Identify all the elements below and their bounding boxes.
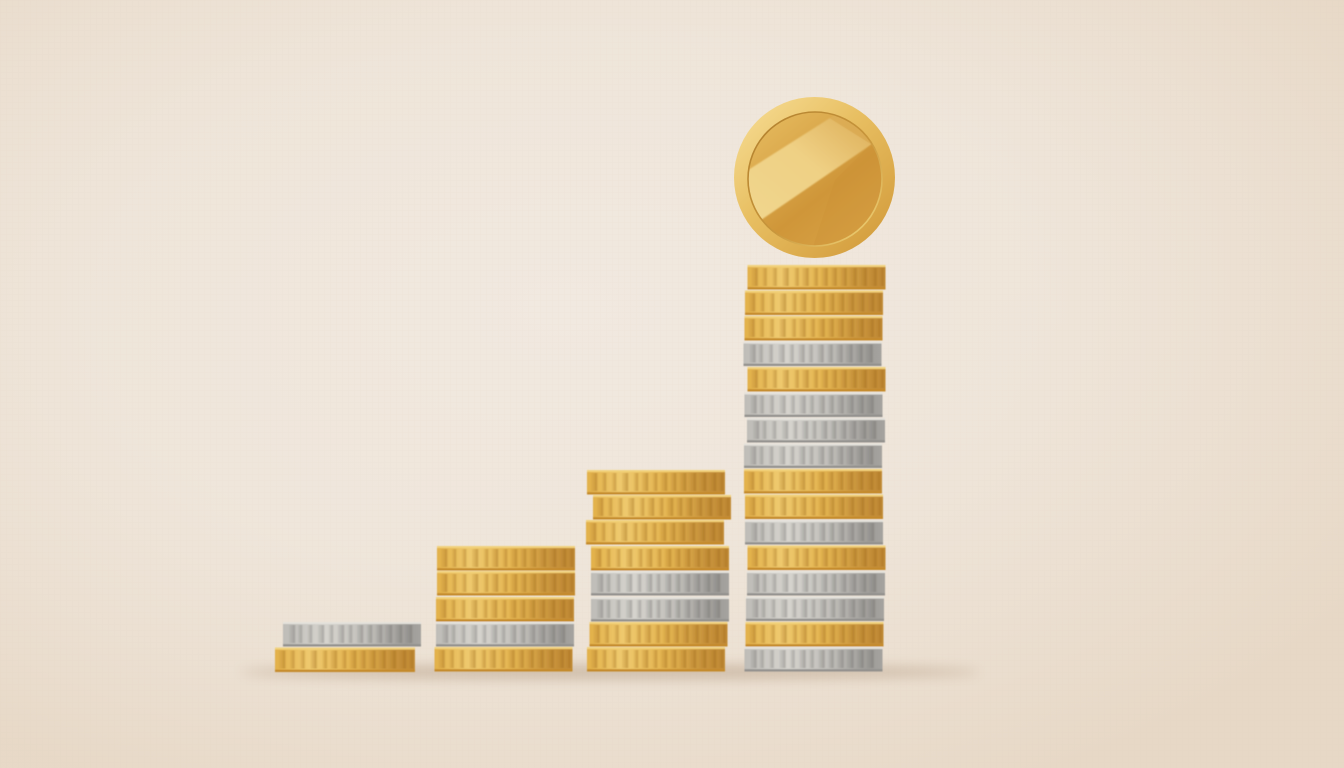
stack 1: two coins — [275, 622, 421, 672]
silver coin — [747, 418, 885, 442]
gold coin — [748, 367, 886, 392]
silver coin — [744, 342, 882, 366]
inner ring — [748, 112, 882, 246]
silver coin — [744, 392, 882, 417]
gold coin — [591, 546, 729, 570]
silver coin — [745, 520, 883, 544]
ground shadow — [240, 665, 980, 679]
gold coin — [744, 469, 882, 494]
stack 2: five coins — [434, 546, 575, 672]
gold coin — [748, 546, 886, 570]
gold coin — [434, 647, 572, 672]
coin face — [748, 112, 882, 246]
silver coin — [747, 571, 885, 596]
gold coin — [745, 290, 883, 315]
stack 4: sixteen coins — [744, 265, 886, 672]
gold coin — [745, 494, 883, 519]
silver coin — [283, 622, 421, 646]
coin rim — [734, 97, 895, 258]
gold coin — [437, 571, 575, 596]
silver coin — [436, 622, 574, 646]
gold coin — [748, 265, 886, 290]
gold coin — [587, 470, 725, 494]
gold coin — [744, 316, 882, 340]
diagonal highlight — [748, 117, 871, 220]
gold coin — [436, 597, 574, 622]
silver coin — [744, 444, 882, 468]
large floating gold coin — [734, 97, 895, 258]
gold coin — [590, 622, 728, 646]
silver coin — [591, 597, 729, 622]
stack 3: eight coins — [586, 470, 731, 672]
silver coin — [591, 571, 729, 596]
gold coin — [437, 546, 575, 570]
silver coin — [744, 647, 882, 672]
gold coin — [746, 622, 884, 646]
gold coin — [586, 520, 724, 544]
gold coin — [593, 495, 731, 520]
silver coin — [746, 596, 884, 621]
gold coin — [587, 647, 725, 672]
gold coin — [275, 648, 415, 672]
